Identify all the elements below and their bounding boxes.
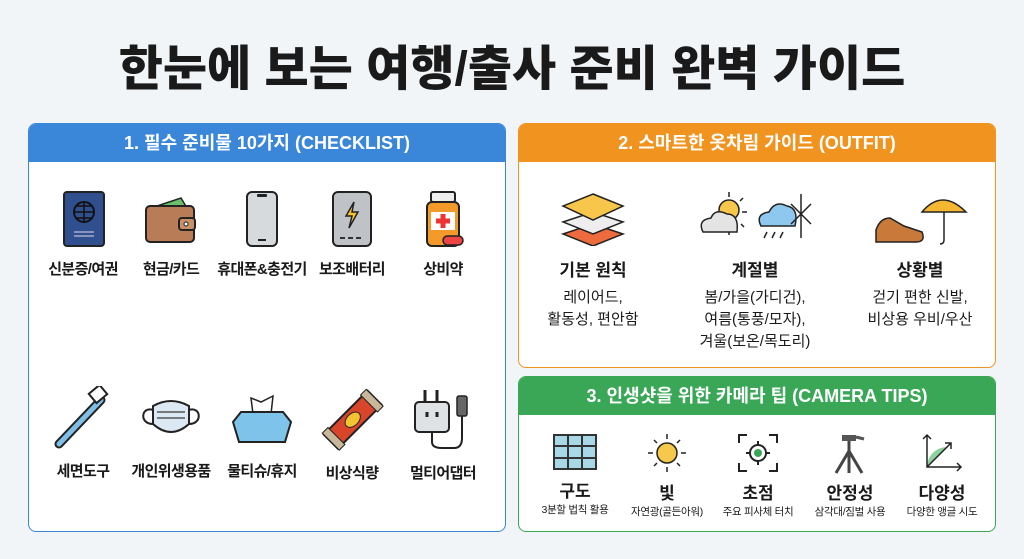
header: camera: 3. 인생샷을 위한 카메라 팁 (CAMERA TIPS)	[587, 386, 927, 406]
header: checklist: 1. 필수 준비물 10가지 (CHECKLIST)	[124, 133, 410, 153]
item: medicine: 상비약	[423, 261, 463, 278]
item: adapter: 멀티어댑터	[410, 465, 476, 482]
item: composition	[542, 434, 608, 516]
item: tissue	[227, 394, 297, 480]
item: season: 봄/가을(가디건),	[704, 289, 806, 306]
item: passport: 신분증/여권	[48, 261, 118, 278]
item: basic: 기본 원칙	[559, 261, 627, 280]
item: basic: 활동성, 편안함	[547, 311, 639, 328]
item: season: 겨울(보온/목도리)	[700, 333, 810, 350]
item: adapter	[410, 390, 476, 482]
item: focus: 주요 피사체 터치	[723, 506, 793, 518]
title: 한눈에 보는 여행/출사 준비 완벽 가이드	[119, 43, 905, 96]
item: tripod: 삼각대/짐벌 사용	[815, 506, 885, 518]
item: situation: 걷기 편한 신발,	[872, 289, 968, 306]
item: situation: 비상용 우비/우산	[868, 311, 972, 328]
panel: camera tips	[518, 376, 996, 532]
panel: outfit	[518, 123, 996, 368]
item: light: 빛	[659, 484, 675, 503]
item: angle: 다양한 앵글 시도	[907, 506, 977, 518]
item: phone	[217, 191, 307, 278]
item: snack: 비상식량	[326, 465, 378, 482]
item: basic	[547, 193, 639, 328]
item: season: 여름(통풍/모자),	[704, 311, 806, 328]
item: toothbrush	[54, 386, 110, 480]
item: focus	[723, 434, 793, 518]
header: outfit: 2. 스마트한 옷차림 가이드 (OUTFIT)	[618, 133, 896, 153]
item: wallet	[143, 197, 200, 278]
item: situation	[868, 199, 972, 328]
item: light: 자연광(골든아워)	[631, 506, 703, 518]
item: focus: 초점	[742, 484, 774, 503]
item: composition: 3분할 법칙 활용	[542, 504, 608, 516]
item: season	[700, 192, 812, 350]
item: wallet: 현금/카드	[143, 261, 199, 278]
item: snack	[322, 388, 384, 482]
item: mask: 개인위생용품	[131, 463, 211, 480]
item: tissue: 물티슈/휴지	[227, 463, 297, 480]
item: power bank: 보조배터리	[319, 261, 385, 278]
item: power bank	[319, 191, 385, 278]
item: basic: 레이어드,	[563, 289, 623, 306]
header: checklist	[29, 124, 505, 162]
item: angle: 다양성	[919, 484, 965, 503]
panel: checklist	[28, 123, 506, 532]
item: toothbrush: 세면도구	[57, 463, 109, 480]
item: situation: 상황별	[897, 261, 943, 280]
item: tripod: 안정성	[827, 484, 873, 503]
item: angle	[907, 434, 978, 518]
header: camera	[519, 377, 995, 415]
item: phone: 휴대폰&충전기	[217, 261, 307, 278]
item: light	[631, 434, 703, 518]
item: passport	[48, 191, 118, 278]
item: medicine	[423, 191, 464, 278]
item: season: 계절별	[732, 261, 778, 280]
item: tripod	[815, 435, 886, 518]
item: mask	[131, 400, 211, 480]
item: composition: 구도	[559, 482, 591, 501]
header: outfit	[519, 124, 995, 162]
